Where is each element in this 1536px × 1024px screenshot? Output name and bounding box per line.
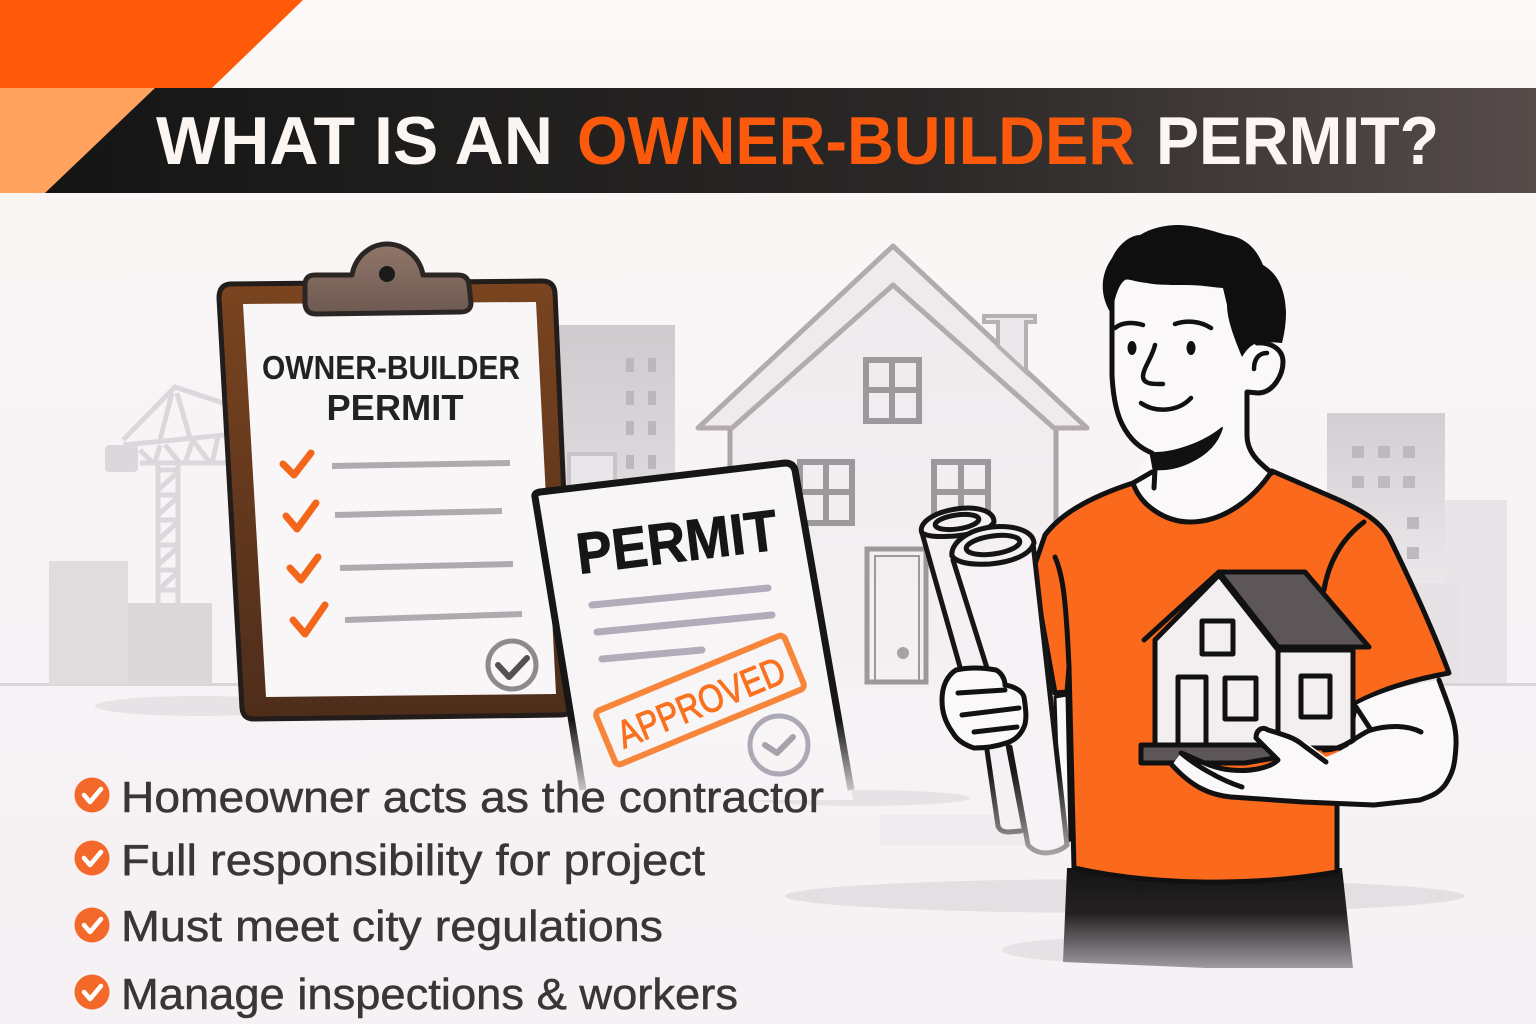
title: WHAT IS AN: [156, 103, 553, 179]
bullet list: [74, 773, 824, 1019]
title: OWNER-BUILDER: [577, 103, 1135, 179]
clipboard: PERMIT: [326, 387, 464, 428]
holding arm: [1172, 680, 1456, 805]
approved seal: [750, 716, 808, 774]
permit document: [535, 463, 853, 800]
neck shadow: [1152, 428, 1222, 469]
seal check: [488, 641, 536, 689]
person: [921, 225, 1456, 968]
title: [156, 103, 1439, 179]
bullet 4: Manage inspections & workers: [121, 970, 738, 1019]
title: PERMIT?: [1156, 103, 1439, 179]
ground shadows: [95, 696, 1465, 963]
title banner: [0, 88, 1536, 193]
face outline: [1112, 300, 1283, 488]
neck: [1133, 392, 1272, 522]
approved stamp: APPROVED: [611, 649, 792, 757]
background skyline: [0, 325, 1536, 686]
clipboard title: OWNER-BUILDER: [262, 349, 520, 386]
back blueprint roll: [921, 508, 1024, 832]
hair: [1103, 225, 1286, 357]
model house: [1141, 572, 1369, 763]
hand with rolls: [942, 668, 1026, 748]
bullet 3: Must meet city regulations: [121, 902, 663, 951]
permit heading: PERMIT: [573, 498, 781, 587]
left arm under sleeve: [1055, 695, 1070, 845]
crane: [105, 387, 227, 603]
checklist: [283, 453, 522, 634]
head: [1112, 280, 1283, 453]
front blueprint roll: [952, 527, 1067, 853]
bullet 2: Full responsibility for project: [121, 836, 705, 885]
face: [1115, 322, 1267, 410]
orange corner shape: [0, 0, 303, 88]
t-shirt: [1033, 471, 1449, 882]
shorts: [1063, 868, 1353, 968]
bullet 1: Homeowner acts as the contractor: [121, 773, 824, 822]
shirt seams: [1055, 522, 1364, 667]
background house: [698, 246, 1087, 690]
clipboard: [219, 244, 573, 719]
clipboard clip: [305, 244, 471, 314]
